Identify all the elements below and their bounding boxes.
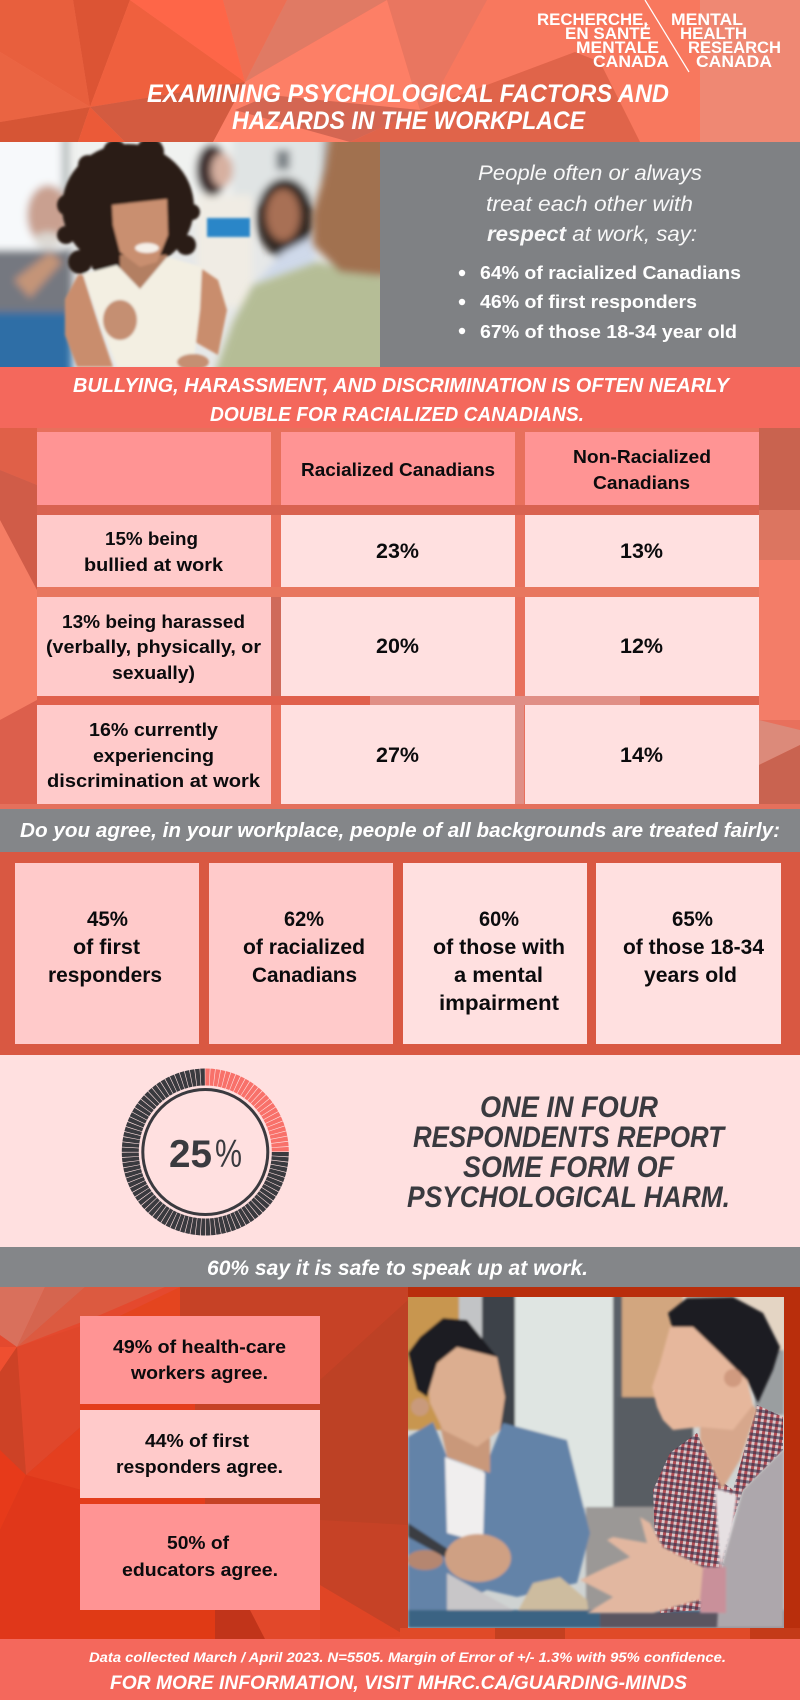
table header row: Canadians: [593, 473, 690, 493]
card: racialized Canadians: 62%: [284, 908, 324, 931]
panel: fairness cards: [0, 852, 800, 1055]
respect statement: respect at work, say:: [487, 223, 697, 246]
logo: [537, 0, 781, 72]
table row: bullied: [37, 515, 759, 587]
card: educators agree: [80, 1504, 320, 1610]
card: mental impairment: of those with: [433, 936, 565, 959]
table row: bullied: 15% being: [105, 529, 198, 549]
table row: discrimination: [37, 705, 759, 804]
card: first responders agree: 44% of first: [145, 1431, 249, 1451]
table header row: [37, 432, 759, 505]
logo: MENTAL: [671, 11, 743, 29]
card: educators agree: 50% of: [167, 1533, 230, 1553]
card: 18-34 years old: [596, 863, 781, 1044]
card: mental impairment: a mental: [454, 964, 543, 987]
table header row: Racialized Canadians: [301, 460, 495, 480]
logo: EN SANTÉ: [565, 24, 651, 43]
bullet list: 64% of racialized Canadians: [480, 262, 741, 283]
table row: discrimination: 14%: [620, 744, 663, 767]
table row: discrimination: 16% currently: [89, 720, 218, 740]
card: health-care workers: 49% of health-care: [113, 1337, 286, 1357]
card: health-care workers: workers agree.: [130, 1363, 268, 1383]
title: [147, 80, 669, 135]
card: first responders agree: responders agree.: [116, 1457, 283, 1477]
folder: [207, 218, 250, 237]
title: HAZARDS IN THE WORKPLACE: [232, 107, 586, 135]
card: 18-34 years old: of those 18-34: [623, 936, 764, 959]
table header row: Non-Racialized: [573, 447, 711, 467]
panel: psychological harm: [0, 1055, 800, 1247]
heading: fairness question band: Do you agree, in your workplace, people of all backgrounds are treated fairly:: [20, 820, 780, 842]
respect statement: treat each other with: [486, 193, 693, 216]
heading: speak up band: 60% say it is safe to speak up at work.: [207, 1257, 588, 1280]
harm statement: PSYCHOLOGICAL HARM.: [407, 1181, 730, 1214]
call to action: FOR MORE INFORMATION, VISIT MHRC.CA/GUARDING-MINDS: [110, 1673, 687, 1694]
table row: bullied: bullied at work: [84, 555, 224, 575]
heading: bullying band: [0, 367, 800, 428]
chart: 25 percent tick ring: [130, 1077, 280, 1227]
table row: harassed: 20%: [376, 635, 419, 658]
table row: harassed: sexually): [112, 663, 195, 683]
photo: two men talking: [400, 1290, 784, 1628]
card: 18-34 years old: years old: [644, 964, 737, 987]
table row: harassed: [37, 597, 759, 696]
card: racialized Canadians: Canadians: [252, 964, 357, 987]
panel: header: [0, 0, 800, 142]
table row: discrimination: discrimination at work: [47, 771, 261, 791]
card: first responders: 45%: [87, 908, 128, 931]
card: racialized Canadians: [209, 863, 393, 1044]
table row: discrimination: 27%: [376, 744, 419, 767]
logo: MENTALE: [576, 39, 659, 57]
card: first responders: [15, 863, 199, 1044]
table row: harassed: 13% being harassed: [62, 612, 245, 632]
heading: speak up band: [0, 1247, 800, 1287]
table row: bullied: 13%: [620, 540, 663, 563]
panel: respect statistics: [380, 142, 800, 367]
table row: harassed: 12%: [620, 635, 663, 658]
table row: harassed: (verbally, physically, or: [46, 637, 261, 657]
table row: bullied: 23%: [376, 540, 419, 563]
card: educators agree: educators agree.: [122, 1560, 278, 1580]
logo: CANADA: [593, 53, 669, 71]
card: mental impairment: 60%: [479, 908, 519, 931]
respect statement: People often or always: [478, 162, 703, 185]
heading: fairness question band: [0, 809, 800, 852]
chart: 25 percent tick ring: %: [215, 1133, 242, 1176]
heading: bullying band: BULLYING, HARASSMENT, AND DISCRIMINATION IS OFTEN NEARLY: [73, 375, 731, 397]
logo: RECHERCHE,: [537, 11, 648, 29]
card: first responders agree: [80, 1410, 320, 1498]
harm statement: SOME FORM OF: [463, 1151, 675, 1184]
card: first responders: responders: [48, 964, 162, 987]
photo: smiling woman in a meeting: [0, 142, 380, 367]
chart: 25 percent tick ring: 25: [169, 1133, 212, 1176]
plaid shirt: [653, 1405, 783, 1613]
panel: speaking up: [0, 1287, 800, 1639]
logo: RESEARCH: [688, 39, 781, 57]
logo: CANADA: [696, 53, 772, 71]
harm statement: RESPONDENTS REPORT: [413, 1121, 726, 1154]
harm statement: ONE IN FOUR: [480, 1091, 658, 1124]
panel: comparison table: [0, 428, 800, 809]
table row: discrimination: experiencing: [93, 746, 214, 766]
card: mental impairment: impairment: [439, 992, 559, 1015]
card: health-care workers: [80, 1316, 320, 1404]
title: EXAMINING PSYCHOLOGICAL FACTORS AND: [147, 80, 669, 108]
harm statement: [407, 1091, 730, 1214]
heading: bullying band: DOUBLE FOR RACIALIZED CANADIANS.: [210, 404, 584, 426]
card: 18-34 years old: 65%: [672, 908, 713, 931]
bullet list: [459, 262, 741, 342]
logo: HEALTH: [680, 25, 747, 43]
bullet list: 67% of those 18-34 year old: [480, 321, 737, 342]
bullet list: 46% of first responders: [480, 291, 697, 312]
card: first responders: of first: [73, 936, 140, 959]
respect statement: [478, 162, 703, 246]
data note: Data collected March / April 2023. N=5505. Margin of Error of +/- 1.3% with 95% confidence.: [89, 1649, 726, 1665]
panel: footer: [0, 1639, 800, 1700]
card: mental impairment: [403, 863, 587, 1044]
card: racialized Canadians: of racialized: [243, 936, 365, 959]
